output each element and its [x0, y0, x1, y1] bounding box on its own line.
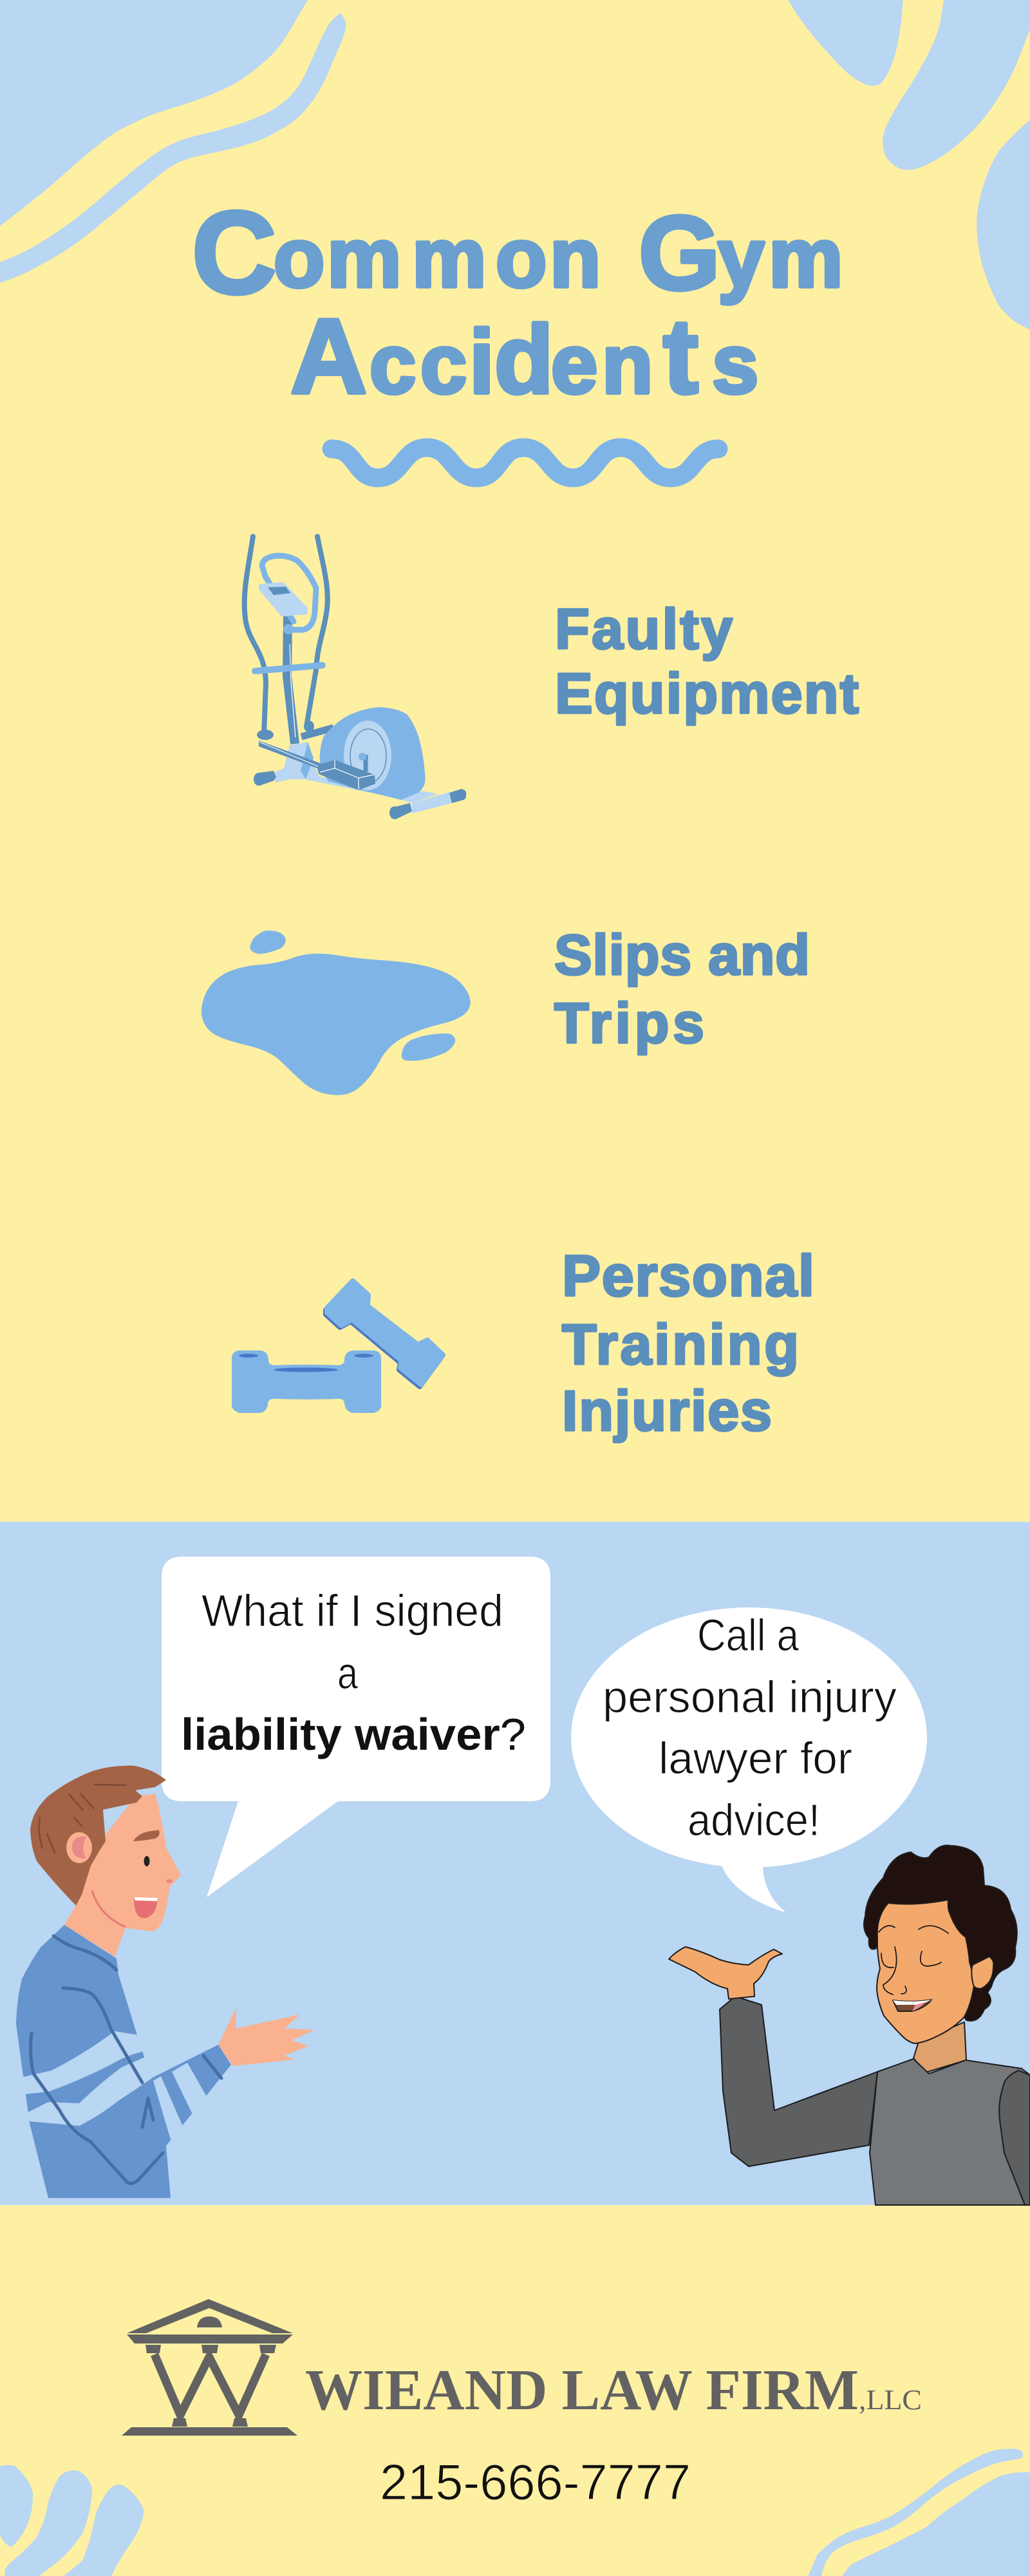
icon: dumbbells: [232, 1281, 443, 1413]
hair: [30, 1766, 166, 1906]
crank: [363, 755, 368, 772]
bubble line 1: Call a: [697, 1610, 799, 1660]
wavy divider: [332, 448, 718, 478]
title line 2: c: [370, 317, 416, 411]
mouth: [893, 2000, 932, 2011]
speech bubble: man: [162, 1557, 550, 1897]
bubble line 1: What if I signed: [201, 1586, 503, 1636]
bubble tail: [721, 1864, 786, 1913]
neck: [913, 2022, 966, 2072]
centre post: [287, 616, 295, 744]
rail pivots: [257, 721, 314, 740]
title line 2: s: [712, 317, 758, 411]
tilted dumbbell shadow: [326, 1283, 442, 1387]
title line 2: A: [290, 297, 367, 415]
flywheel centre: [344, 721, 391, 790]
bubble line 4: advice!: [688, 1795, 820, 1845]
phone number: 215-666-7777: [380, 2454, 691, 2510]
horizontal dumbbell: [232, 1350, 381, 1413]
flywheel: [320, 707, 426, 800]
bottom-left decorative blobs: [0, 2465, 144, 2576]
torso: [870, 2059, 1030, 2205]
logo W: [154, 2354, 266, 2415]
arm highlights: [259, 742, 374, 790]
bottom-right decorative blobs: [808, 2448, 1030, 2576]
title line 1: m: [769, 211, 843, 305]
label line 1: Personal: [562, 1244, 814, 1309]
raised arm: [720, 1996, 877, 2166]
hair strands: [39, 1785, 126, 1853]
ellipse bubble: [571, 1607, 927, 1868]
mouth: [134, 1897, 158, 1918]
eyebrow: [133, 1830, 160, 1841]
label line 2: Trips: [554, 991, 704, 1055]
label line 3: Injuries: [562, 1379, 772, 1443]
hand: [218, 2008, 315, 2066]
bubble line 3: liability waiver?: [181, 1709, 526, 1759]
bubble line 2: personal injury: [603, 1672, 897, 1722]
label: faulty equipment: [555, 597, 859, 725]
title line 2: e: [551, 317, 597, 411]
title line 2: n: [602, 317, 653, 411]
droplet top: [251, 932, 285, 952]
label line 2: Training: [562, 1312, 799, 1376]
cross bar: [255, 665, 323, 671]
logo roof dome: [197, 2316, 222, 2327]
console screen: [268, 587, 290, 595]
face: [877, 1900, 974, 2043]
title line 1: m: [412, 211, 487, 305]
ear: [66, 1832, 92, 1863]
title line 1: m: [327, 211, 402, 305]
console: [259, 582, 308, 616]
title line 2: d: [494, 305, 554, 413]
left foot cap: [254, 773, 264, 786]
base frame: [276, 742, 406, 800]
bubble line 3: lawyer for: [659, 1733, 852, 1783]
title line 1: n: [550, 211, 601, 305]
post highlight: [290, 644, 295, 737]
tongue: [912, 2002, 925, 2011]
teeth: [893, 2000, 932, 2005]
base wedge: [301, 742, 314, 779]
logo roof: [127, 2299, 293, 2333]
neck and face: [64, 1794, 181, 1956]
puddle main: [203, 955, 469, 1094]
logo column tops: [145, 2345, 276, 2353]
front bar support: [401, 791, 438, 803]
logo entablature: [127, 2334, 293, 2344]
title line 1: o: [496, 211, 547, 305]
front bar: [412, 792, 452, 813]
title line 1: C: [192, 187, 276, 318]
front bar end caps: [395, 789, 466, 819]
nose blush: [166, 1879, 173, 1883]
icon: water puddle: [203, 932, 469, 1094]
label: personal training injuries: [562, 1244, 814, 1443]
dumbbell shadows: [239, 1354, 373, 1372]
title: [192, 187, 843, 415]
logo column bases: [172, 2418, 248, 2427]
title line 1: G: [639, 194, 720, 312]
title line 2: c: [420, 317, 467, 411]
icon: elliptical machine: [245, 536, 466, 819]
label line 1: Slips and: [554, 923, 810, 987]
label line 2: Equipment: [555, 661, 859, 725]
post joint: [283, 624, 294, 634]
hand: [669, 1947, 782, 1999]
firm name: WIEAND LAW FIRM: [305, 2358, 859, 2422]
title line 1: y: [718, 211, 764, 305]
front cap ellipse: [389, 806, 400, 819]
handlebar loop: [262, 556, 316, 630]
crank knob: [359, 753, 366, 761]
teeth: [134, 1897, 158, 1901]
pedal arm: [259, 741, 375, 790]
illustration: man in striped sweater: [16, 1766, 315, 2198]
title line 2: t: [663, 297, 698, 415]
back rear bar: [301, 728, 333, 737]
inner ear: [72, 1837, 86, 1859]
left foot: [258, 771, 276, 786]
facial lines: [879, 1926, 948, 1994]
logo base: [122, 2427, 297, 2436]
top-left decorative blob: [0, 0, 346, 283]
far arm: [999, 2070, 1030, 2205]
sweater: [16, 1925, 231, 2198]
speech bubble: lawyer: [571, 1607, 927, 1913]
top-right decorative blobs: [788, 0, 1030, 330]
sweater stripes: [21, 2031, 208, 2144]
label line 1: Faulty: [555, 597, 733, 661]
flywheel ring: [350, 729, 386, 783]
eye: [144, 1856, 149, 1866]
firm suffix: ,LLC: [859, 2384, 922, 2416]
title line 2: i: [469, 311, 494, 412]
logo: Wieand Law Firm: [122, 2299, 922, 2436]
tilted dumbbell: [327, 1281, 443, 1385]
bubble body and tail: [162, 1557, 550, 1897]
ear: [971, 1956, 993, 1989]
panel: conversation: [0, 1522, 1030, 2205]
sweater folds: [31, 1936, 221, 2183]
jaw line: [92, 1891, 126, 1927]
bubble line 2: a: [337, 1648, 358, 1698]
droplet right: [403, 1035, 454, 1059]
label: slips and trips: [554, 923, 810, 1055]
hair: [864, 1845, 1017, 2021]
title line 1: o: [274, 211, 324, 305]
illustration: lawyer gesturing: [669, 1845, 1030, 2205]
side rails: [245, 536, 328, 734]
